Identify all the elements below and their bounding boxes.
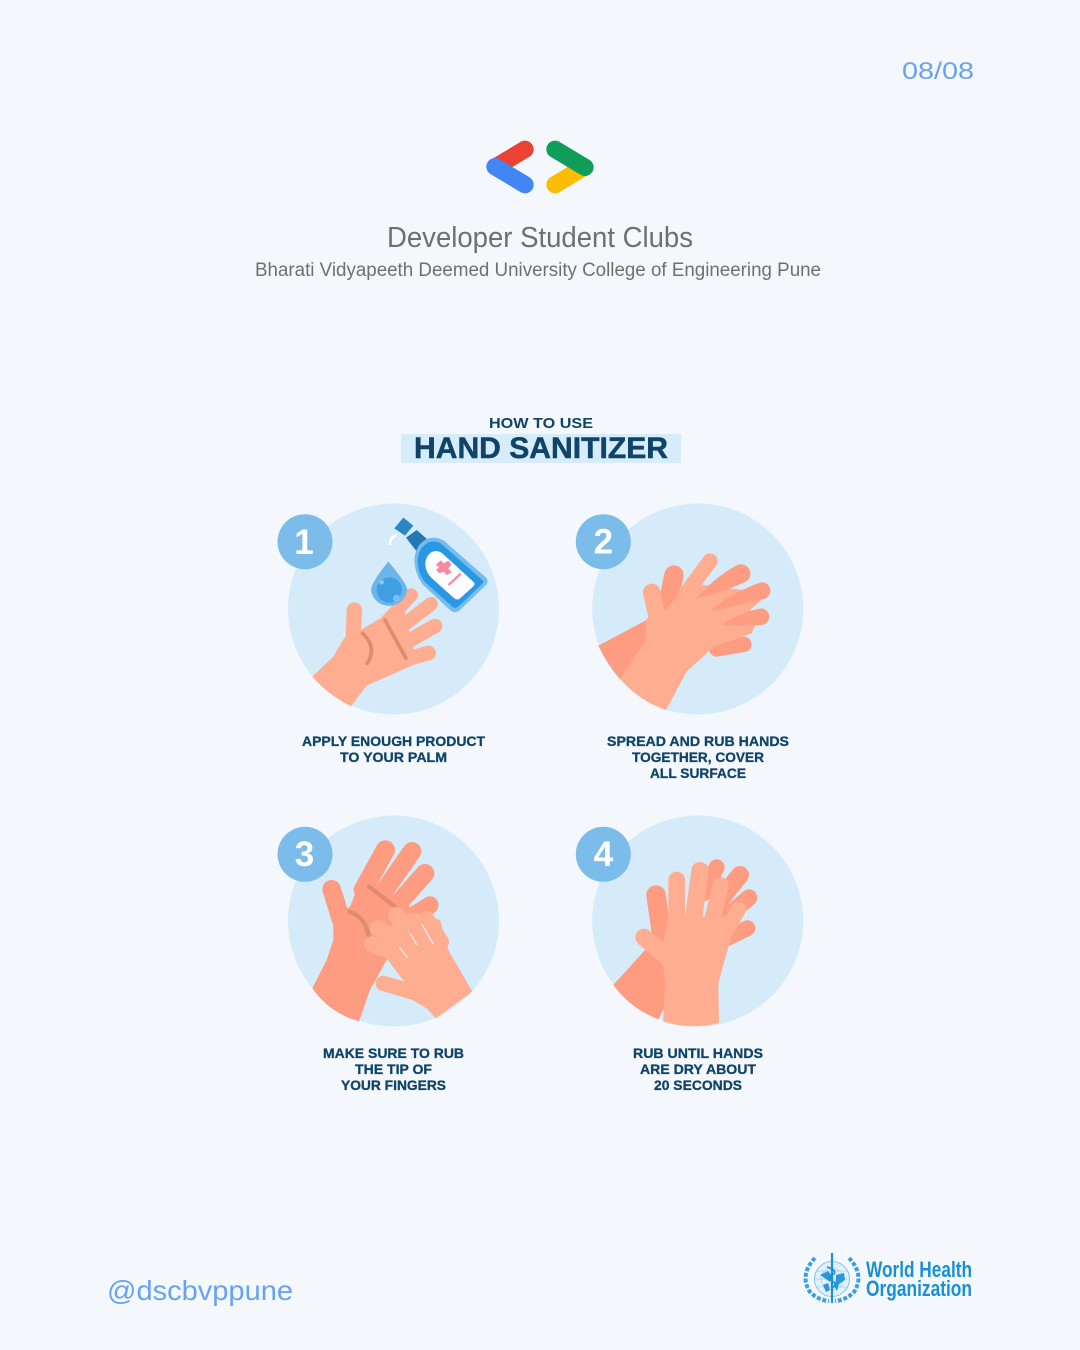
icon: hands palm to palm bbox=[613, 867, 749, 1026]
number badge 2 bbox=[576, 514, 631, 569]
caption step 3: THE TIP OF bbox=[355, 1062, 432, 1077]
caption step 1: TO YOUR PALM bbox=[340, 750, 447, 765]
caption step 2: TOGETHER, COVER bbox=[632, 750, 764, 765]
number badge 4 bbox=[576, 827, 631, 882]
icon: world health organization emblem bbox=[806, 1253, 858, 1303]
title: how to use hand sanitizer: HAND SANITIZER bbox=[414, 432, 668, 465]
social handle: @dscbvppune bbox=[107, 1275, 293, 1306]
number badge 1 bbox=[278, 514, 332, 569]
caption step 4 bbox=[633, 1046, 763, 1093]
icon: sanitizer drop bbox=[371, 562, 407, 606]
world health organization wordmark: World Health bbox=[866, 1257, 972, 1282]
panel: step 1 apply product bbox=[278, 504, 499, 765]
caption step 2: ALL SURFACE bbox=[650, 766, 746, 781]
caption step 3: YOUR FINGERS bbox=[341, 1078, 446, 1093]
icon: developer student clubs logo bbox=[495, 149, 585, 185]
number badge 1: 1 bbox=[294, 523, 314, 562]
title: how to use hand sanitizer: HOW TO USE bbox=[489, 415, 593, 432]
caption step 1 bbox=[302, 734, 486, 765]
number badge 2: 2 bbox=[594, 522, 613, 562]
number badge 3 bbox=[278, 827, 332, 882]
world health organization wordmark bbox=[866, 1257, 972, 1301]
caption step 2: SPREAD AND RUB HANDS bbox=[607, 734, 789, 749]
panel: step 3 rub fingertips bbox=[278, 816, 499, 1093]
organisation name: Developer Student Clubs bbox=[387, 222, 693, 254]
caption step 1: APPLY ENOUGH PRODUCT bbox=[302, 734, 486, 749]
panel: step 4 rub until dry bbox=[576, 816, 803, 1093]
caption step 2 bbox=[607, 734, 789, 781]
caption step 3: MAKE SURE TO RUB bbox=[323, 1046, 464, 1061]
icon: overlapping hands bbox=[598, 561, 770, 710]
icon: sanitizer bottle bbox=[390, 518, 488, 612]
number badge 4: 4 bbox=[594, 835, 614, 874]
world health organization wordmark: Organization bbox=[866, 1276, 972, 1301]
caption step 4: ARE DRY ABOUT bbox=[640, 1062, 757, 1077]
caption step 4: 20 SECONDS bbox=[654, 1078, 742, 1093]
icon: hand rubbing fingertips bbox=[312, 850, 472, 1021]
caption step 4: RUB UNTIL HANDS bbox=[633, 1046, 763, 1061]
number badge 3: 3 bbox=[295, 835, 314, 874]
college name: Bharati Vidyapeeth Deemed University College of Engineering Pune bbox=[255, 260, 821, 281]
page number: 08/08 bbox=[902, 58, 974, 85]
panel: step 2 spread and rub bbox=[576, 504, 803, 781]
title: how to use hand sanitizer bbox=[401, 415, 681, 465]
icon: hand with open palm bbox=[312, 595, 435, 706]
caption step 3 bbox=[323, 1046, 464, 1093]
